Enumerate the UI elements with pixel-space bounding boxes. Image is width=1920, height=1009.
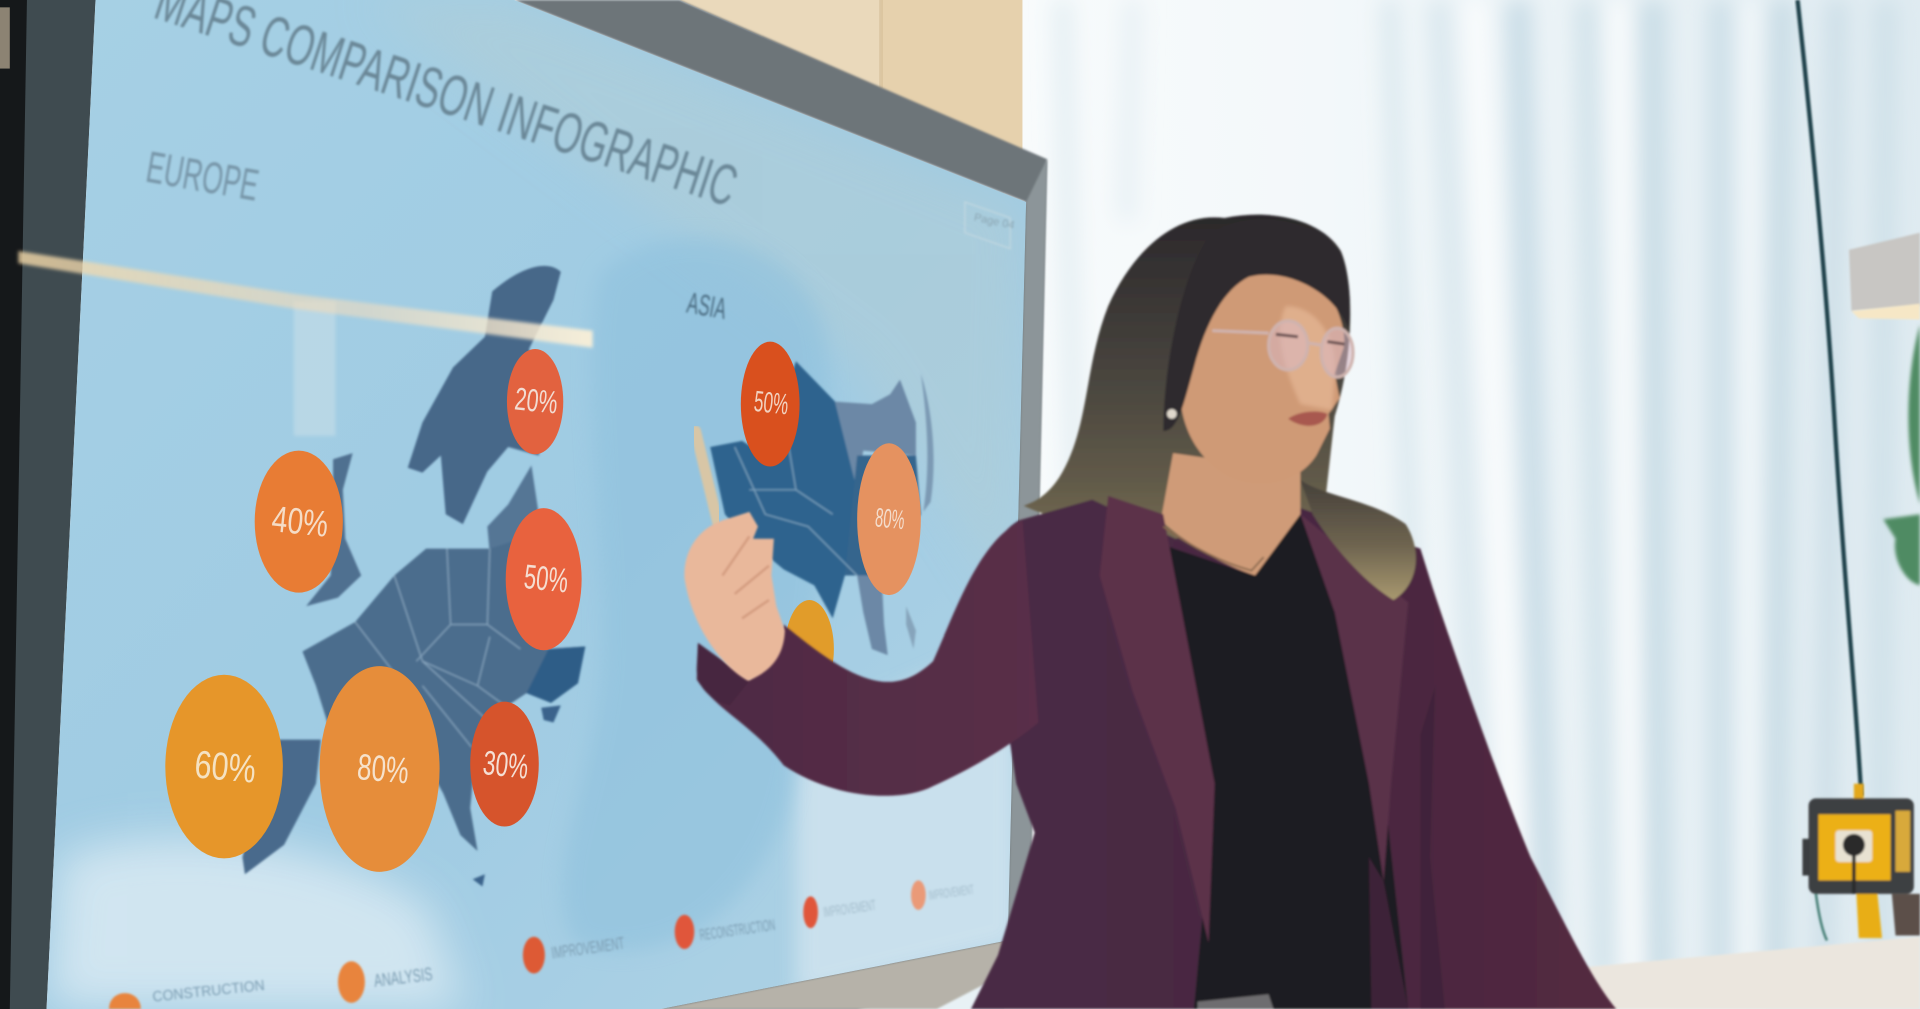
data bubble: Asia 80%: 80% [874,502,906,535]
map: Asia [710,361,934,655]
left lapel [1100,496,1215,943]
Iberia [242,740,321,874]
earring [1167,409,1177,419]
data bubble: 30% [470,702,539,827]
hand [684,512,785,681]
continental Europe [302,544,560,852]
face [1180,271,1344,484]
legend [109,880,975,1009]
person reflection shadow [562,238,830,951]
page tag [965,202,1015,249]
data bubble: 50%: 50% [522,558,570,600]
page tag: Page 04 [973,212,1015,232]
data bubble: 20%: 20% [513,380,559,421]
waistband glimpse [1198,994,1273,1009]
glasses [1212,321,1353,377]
legend: CONSTRUCTION [152,978,266,1006]
fringe [1163,219,1350,431]
bottom left reflection [47,837,465,1009]
Turkey [527,647,585,703]
front hair lock [1300,480,1416,600]
lips [1288,412,1327,426]
jacket opening fold [1369,857,1408,1009]
black top [1163,514,1408,1009]
data bubble: Asia 80% [857,443,921,595]
pointer pen [696,431,718,522]
cuff [697,643,749,705]
right lapel [1300,514,1408,882]
top right pale tint [488,37,1026,519]
hanging cable [1798,0,1861,796]
legend: ANALYSIS [373,963,434,991]
hair [1024,215,1350,551]
data bubble: partly hidden [787,600,834,663]
background: sheer curtain [1004,0,1920,1009]
neck [1161,453,1300,576]
face highlight [1280,306,1335,410]
jacket body [971,500,1616,1009]
data bubble: 30%: 30% [481,744,530,787]
window glare on screen [18,251,593,348]
map: Europe [242,266,585,887]
background: beige wall [680,0,1022,153]
data bubble: Asia 50%: 50% [752,385,790,421]
panel: presentation screen: IMPROVEMENT [928,882,975,903]
pale vertical window reflection [294,301,336,436]
lamp [1849,233,1920,320]
eyes [1276,334,1344,344]
Scandinavia [408,266,561,524]
data bubble: 50% [506,508,582,650]
legend: IMPROVEMENT [822,898,877,921]
monitor bezel and dark left frame [0,0,1047,1009]
data bubble: Asia 50% [741,342,800,467]
islands [473,705,561,887]
bottom right reflection [790,744,1012,984]
heading: Asia: ASIA [684,287,729,326]
screen background [47,0,1026,1009]
legend: RECONSTRUCTION [699,917,776,944]
power socket box [1802,784,1920,940]
presenter [697,215,1616,1009]
right sleeve fold [1420,686,1445,1009]
legend: IMPROVEMENT [550,933,626,963]
plant leaves [1883,324,1920,585]
data bubble: 60% [165,675,283,858]
United Kingdom [306,453,361,606]
Baltics [487,465,539,553]
data bubble: 80%: 80% [356,746,411,791]
panel: presentation screen [47,0,1026,1009]
table top [1420,937,1920,1009]
data bubble: 40%: 40% [270,498,330,545]
data bubble: 60%: 60% [193,743,258,792]
data bubble: 80% [320,666,440,872]
borders [355,549,520,747]
pointing arm [697,520,1038,796]
data bubble: 40% [255,451,343,593]
necklace [1163,527,1264,571]
data bubble: 20% [507,349,563,454]
heading: Europe: EUROPE [143,143,262,211]
